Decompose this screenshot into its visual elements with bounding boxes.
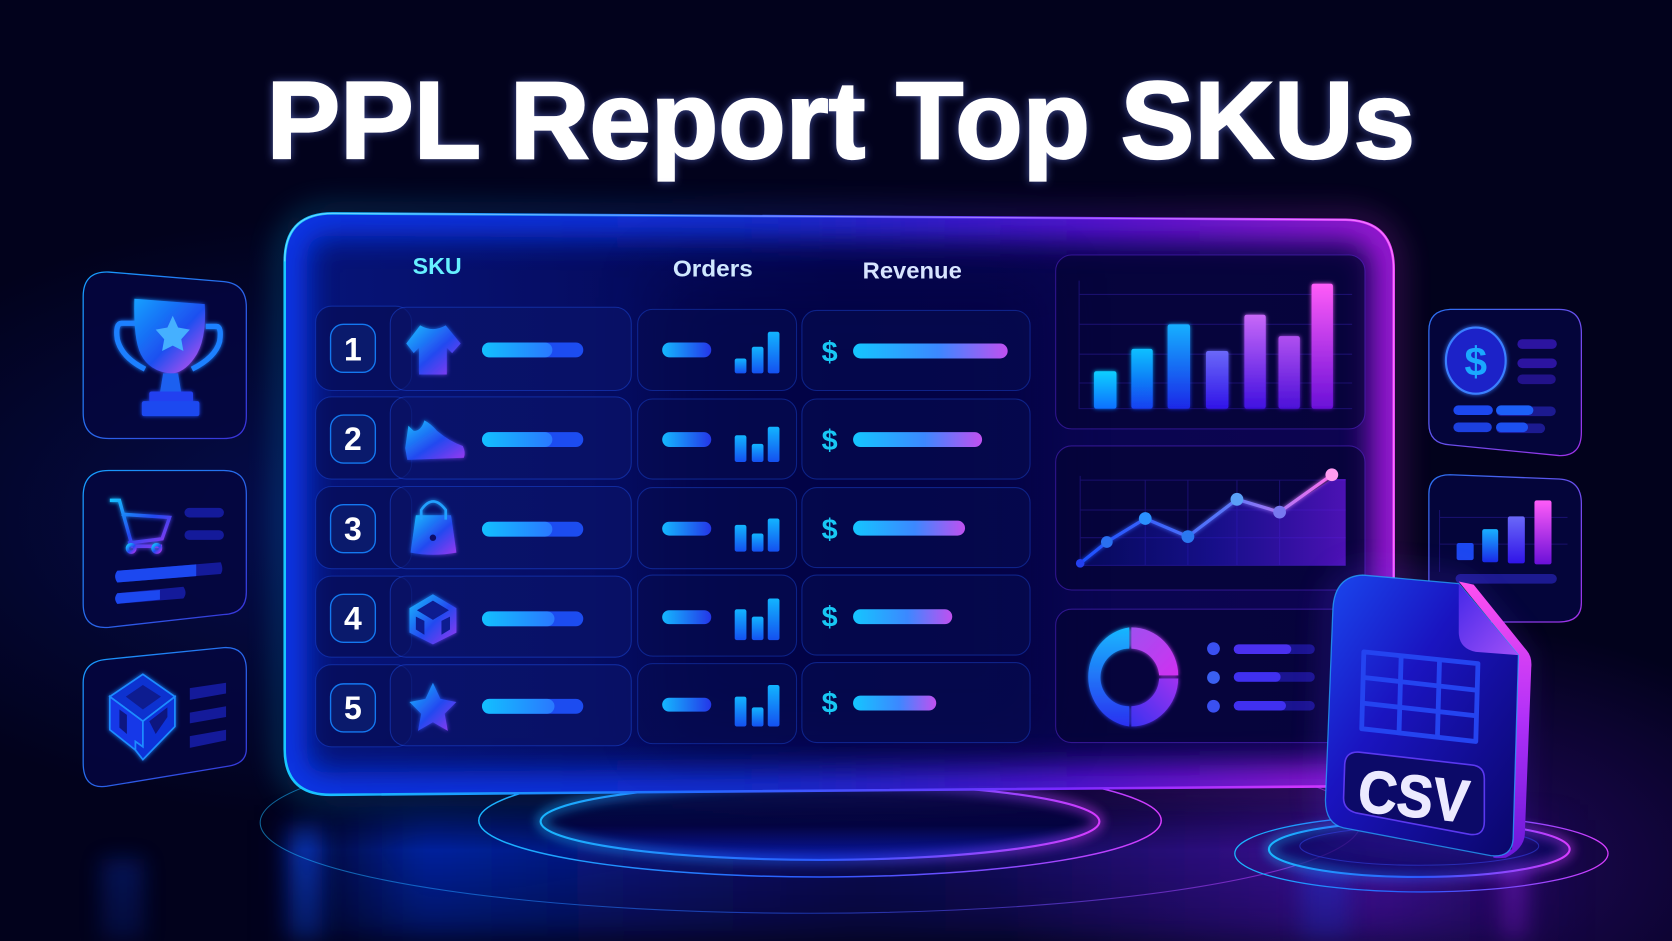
rank badge 4: [331, 594, 375, 642]
column heading: Revenue: Revenue: [863, 257, 962, 283]
rank badge 1: [331, 324, 375, 372]
orders bar 4: [662, 610, 711, 624]
orders mini chart 3: [735, 519, 779, 552]
icon: shopping bag: [411, 501, 456, 555]
revenue bar 3: [853, 521, 965, 536]
row 2: [316, 397, 1030, 479]
icon: t-shirt: [406, 325, 461, 374]
rank badge 2: 2: [344, 421, 362, 457]
file fold: [1459, 584, 1518, 655]
file side: [1459, 581, 1531, 858]
icon: trophy star: [156, 316, 190, 351]
rank badge 5: [331, 684, 375, 732]
column heading: SKU: SKU: [413, 253, 462, 279]
dollar 1: $: [822, 337, 838, 369]
orders mini chart 4: [735, 599, 779, 640]
rank badge 4: 4: [344, 600, 362, 636]
donut panel: [1056, 609, 1376, 743]
SKU bar 4: [482, 611, 583, 626]
SKU bar 2: [482, 432, 583, 447]
line chart panel: [1056, 446, 1365, 590]
rank badge 5: 5: [344, 690, 362, 726]
CSV file icon: [1325, 575, 1531, 858]
column heading: Orders: Orders: [673, 255, 753, 281]
bar chart panel: [1056, 255, 1365, 429]
left card: cube: [83, 648, 246, 787]
floor reflections: [101, 795, 1578, 941]
file face: [1325, 575, 1518, 856]
SKU bar 5: [482, 699, 583, 714]
row 3: [316, 487, 1030, 569]
rank badge 3: [331, 505, 375, 553]
revenue bar 5: [853, 696, 936, 711]
cube card lines: [190, 683, 226, 748]
spreadsheet grid: [1362, 652, 1478, 741]
rank badge 2: [331, 415, 375, 463]
legend: [1207, 642, 1315, 713]
revenue bar 4: [853, 609, 952, 624]
dollar 2: $: [822, 425, 838, 457]
orders mini chart 5: [735, 685, 779, 727]
row 1: [316, 306, 1030, 390]
revenue bar 2: [853, 432, 982, 447]
icon: dollar coin: [1446, 328, 1506, 394]
orders bar 3: [662, 522, 711, 536]
dollar 3: $: [822, 514, 838, 546]
right card: bars: [1429, 475, 1581, 622]
platform rings: [260, 732, 1361, 913]
main table panel: [285, 213, 1394, 795]
orders mini chart 1: [735, 332, 779, 373]
left card: cart: [83, 470, 246, 627]
donut chart: [1088, 627, 1178, 727]
icon: box: [409, 594, 456, 644]
dollar 4: $: [822, 601, 838, 633]
icon: dollar coin: $: [1465, 339, 1487, 385]
row 5: [316, 663, 1030, 747]
icon: cube: [110, 674, 175, 760]
rank badge 1: 1: [344, 332, 362, 368]
orders bar 1: [662, 342, 711, 357]
SKU bar 3: [482, 522, 583, 537]
orders bar 2: [662, 432, 711, 447]
icon: cart: [110, 500, 170, 552]
left card: trophy: [83, 272, 246, 438]
rank badge 3: 3: [344, 511, 362, 547]
row 4: [316, 575, 1030, 657]
SKU bar 1: [482, 342, 583, 357]
icon: trophy: [117, 299, 220, 416]
CSV label: CSV: [1355, 757, 1472, 835]
CSV pedestal rings: [1235, 815, 1608, 892]
mini bar chart: [1457, 500, 1552, 564]
panel glow: [285, 213, 1394, 795]
dollar 5: $: [822, 688, 838, 720]
dollar card lines: [1453, 339, 1557, 433]
cart card lines: [115, 508, 224, 604]
revenue bar 1: [853, 344, 1008, 358]
orders bar 5: [662, 698, 711, 712]
title: PPL Report Top SKUs: [267, 60, 1415, 182]
orders mini chart 2: [735, 427, 779, 462]
icon: star: [409, 683, 456, 731]
icon: shoe: [405, 420, 465, 460]
right card: dollar: [1429, 309, 1581, 456]
